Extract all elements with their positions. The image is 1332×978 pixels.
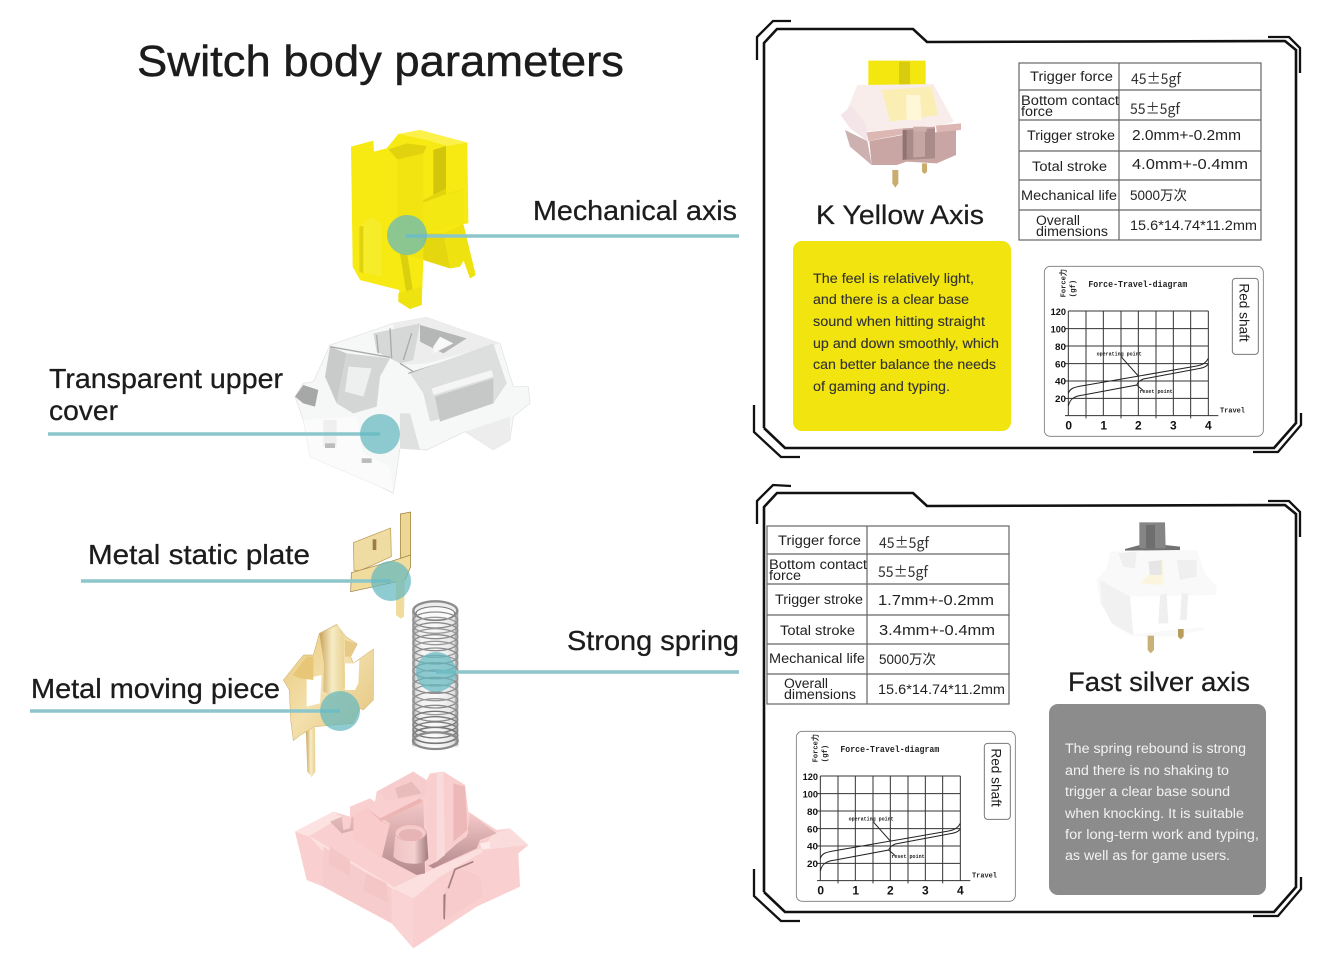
callout: metal static plate [81,539,411,601]
table: K Yellow Axis parameters: 15.6*14.74*11.2mm [1130,218,1257,233]
callout: mechanical axis: Mechanical axis [533,195,737,226]
chart: force travel diagram, K Yellow Axis [1044,266,1263,436]
table: K Yellow Axis parameters: dimensions [1036,224,1108,239]
title: Switch body parameters [137,37,624,86]
text block: K Yellow Axis description: of gaming and typing. [813,379,950,394]
chart: force travel diagram, Fast silver axis: 100 [803,789,818,799]
chart: force travel diagram, K Yellow Axis: Force-Travel-diagram [1088,280,1188,290]
chart: force travel diagram, K Yellow Axis: reset point [1139,388,1173,395]
chart: force travel diagram, Fast silver axis: 120 [803,772,818,782]
chart: force travel diagram, K Yellow Axis: 100 [1051,324,1066,334]
chart: force travel diagram, K Yellow Axis: 20 [1055,394,1066,404]
table: K Yellow Axis parameters [1019,63,1261,240]
text block: Fast silver axis description: for long-term work and typing, [1065,827,1259,842]
chart: force travel diagram, K Yellow Axis: 1 [1100,418,1107,432]
text block: Fast silver axis description: when knocking. It is suitable [1064,806,1244,821]
chart: force travel diagram, K Yellow Axis: 60 [1055,359,1066,369]
callout: strong spring: Strong spring [567,625,739,656]
illustration: yellow mechanical axis stem [351,130,476,309]
table: Fast silver axis parameters: Total stroke [780,623,855,638]
table: Fast silver axis parameters: 5000万次 [879,652,936,667]
table: K Yellow Axis parameters: Overall [1036,213,1080,228]
chart: force travel diagram, Fast silver axis: 60 [807,824,818,834]
chart: force travel diagram, Fast silver axis: 2 [887,883,894,897]
chart: force travel diagram, Fast silver axis: reset point [891,853,925,860]
icon: K yellow switch [841,61,961,188]
chart: force travel diagram, K Yellow Axis: 0 [1065,418,1072,432]
icon: silver switch [1097,522,1217,653]
table: K Yellow Axis parameters: Bottom contact [1021,93,1119,108]
text block: K Yellow Axis description: and there is a clear base [813,292,969,307]
table: K Yellow Axis parameters: Trigger stroke [1027,128,1115,143]
text block: Fast silver axis description: The spring rebound is strong [1065,741,1246,756]
table: K Yellow Axis parameters: Trigger force [1030,69,1113,84]
table: Fast silver axis parameters: 3.4mm+-0.4mm [879,623,995,639]
illustration: strong spring [412,601,458,749]
chart: force travel diagram, Fast silver axis: 20 [807,859,818,869]
table: Fast silver axis parameters: Trigger force [778,533,861,548]
table: Fast silver axis parameters: 55±5gf [878,561,929,582]
callout: transparent upper cover [48,363,400,454]
text block: Fast silver axis description: trigger a clear base sound [1065,784,1230,799]
panel frame [754,21,1301,457]
illustration: metal static plate [351,512,411,619]
panel: K Yellow Axis [754,21,1301,457]
table: Fast silver axis parameters: 45±5gf [879,532,930,553]
chart: force travel diagram, K Yellow Axis: 40 [1055,377,1066,387]
chart: force travel diagram, K Yellow Axis: 4 [1205,418,1212,432]
callout: strong spring [416,625,739,692]
text block: K Yellow Axis description: The feel is relatively light, [813,271,974,286]
text block: K Yellow Axis description: can better balance the needs [813,357,996,372]
heading: K Yellow Axis: K Yellow Axis [816,200,984,230]
chart: force travel diagram, K Yellow Axis: Red shaft [1236,283,1251,342]
table: K Yellow Axis parameters: force [1021,104,1053,119]
text block: K Yellow Axis description: up and down smoothly, which [813,336,999,351]
callout: mechanical axis [387,195,739,255]
chart: force travel diagram, K Yellow Axis: 3 [1170,418,1177,432]
chart: force travel diagram, Fast silver axis: 1 [852,883,859,897]
text block: Fast silver axis description: as well as for game users. [1065,848,1230,863]
table: Fast silver axis parameters: 15.6*14.74*11.2mm [878,682,1005,697]
table: Fast silver axis parameters [767,526,1009,704]
text block: K Yellow Axis description: sound when hitting straight [813,314,985,329]
chart: force travel diagram, K Yellow Axis: 120 [1051,307,1066,317]
chart: force travel diagram, Fast silver axis: Force力 [811,734,821,762]
callout: metal static plate: Metal static plate [88,539,310,570]
table: Fast silver axis parameters: dimensions [784,687,856,702]
chart: force travel diagram, Fast silver axis: Travel [972,872,997,880]
chart: force travel diagram, K Yellow Axis: 80 [1055,342,1066,352]
text block: Fast silver axis description: and there is no shaking to [1065,763,1229,778]
chart: force travel diagram, Fast silver axis: 3 [922,883,929,897]
chart: force travel diagram, K Yellow Axis: 2 [1135,418,1142,432]
table: Fast silver axis parameters: Overall [784,676,828,691]
table: Fast silver axis parameters: Trigger stroke [775,592,863,607]
chart: force travel diagram, Fast silver axis: Red shaft [988,748,1003,807]
chart: force travel diagram, Fast silver axis: 4 [957,883,964,897]
callout: metal moving piece: Metal moving piece [31,673,280,704]
panel frame [754,485,1301,921]
chart: force travel diagram, Fast silver axis: 40 [807,842,818,852]
table: K Yellow Axis parameters: Total stroke [1032,159,1107,174]
table: K Yellow Axis parameters: Mechanical life [1021,188,1117,203]
chart: force travel diagram, Fast silver axis [796,731,1015,901]
chart: force travel diagram, K Yellow Axis: operating point [1097,350,1142,357]
illustration: metal moving piece [283,624,373,777]
heading: Fast silver axis: Fast silver axis [1068,667,1250,697]
table: K Yellow Axis parameters: 45±5gf [1131,68,1182,89]
table: K Yellow Axis parameters: 55±5gf [1130,98,1181,119]
text block: K Yellow Axis description [793,241,1011,431]
chart: force travel diagram, Fast silver axis: Force-Travel-diagram [840,745,940,755]
chart: force travel diagram, Fast silver axis: (gf) [822,745,830,762]
illustration: transparent upper cover [295,317,530,493]
table: Fast silver axis parameters: Bottom contact [769,557,867,572]
callout: transparent upper cover: Transparent upper [49,363,283,394]
text block: Fast silver axis description [1049,704,1266,895]
table: K Yellow Axis parameters: 2.0mm+-0.2mm [1132,128,1241,144]
table: Fast silver axis parameters: 1.7mm+-0.2mm [878,593,994,609]
chart: force travel diagram, Fast silver axis: operating point [849,815,894,822]
chart: force travel diagram, Fast silver axis: 0 [817,883,824,897]
table: Fast silver axis parameters: force [769,568,801,583]
illustration: pink base [295,772,528,948]
table: K Yellow Axis parameters: 5000万次 [1130,188,1187,203]
panel: Fast silver axis [754,485,1301,921]
chart: force travel diagram, K Yellow Axis: Force力 [1059,269,1069,297]
chart: force travel diagram, K Yellow Axis: (gf) [1070,280,1078,297]
table: K Yellow Axis parameters: 4.0mm+-0.4mm [1132,157,1248,173]
chart: force travel diagram, Fast silver axis: 80 [807,807,818,817]
table: Fast silver axis parameters: Mechanical life [769,651,865,666]
callout: transparent upper cover: cover [49,395,118,426]
chart: force travel diagram, K Yellow Axis: Travel [1220,407,1245,415]
callout: metal moving piece [30,673,360,731]
